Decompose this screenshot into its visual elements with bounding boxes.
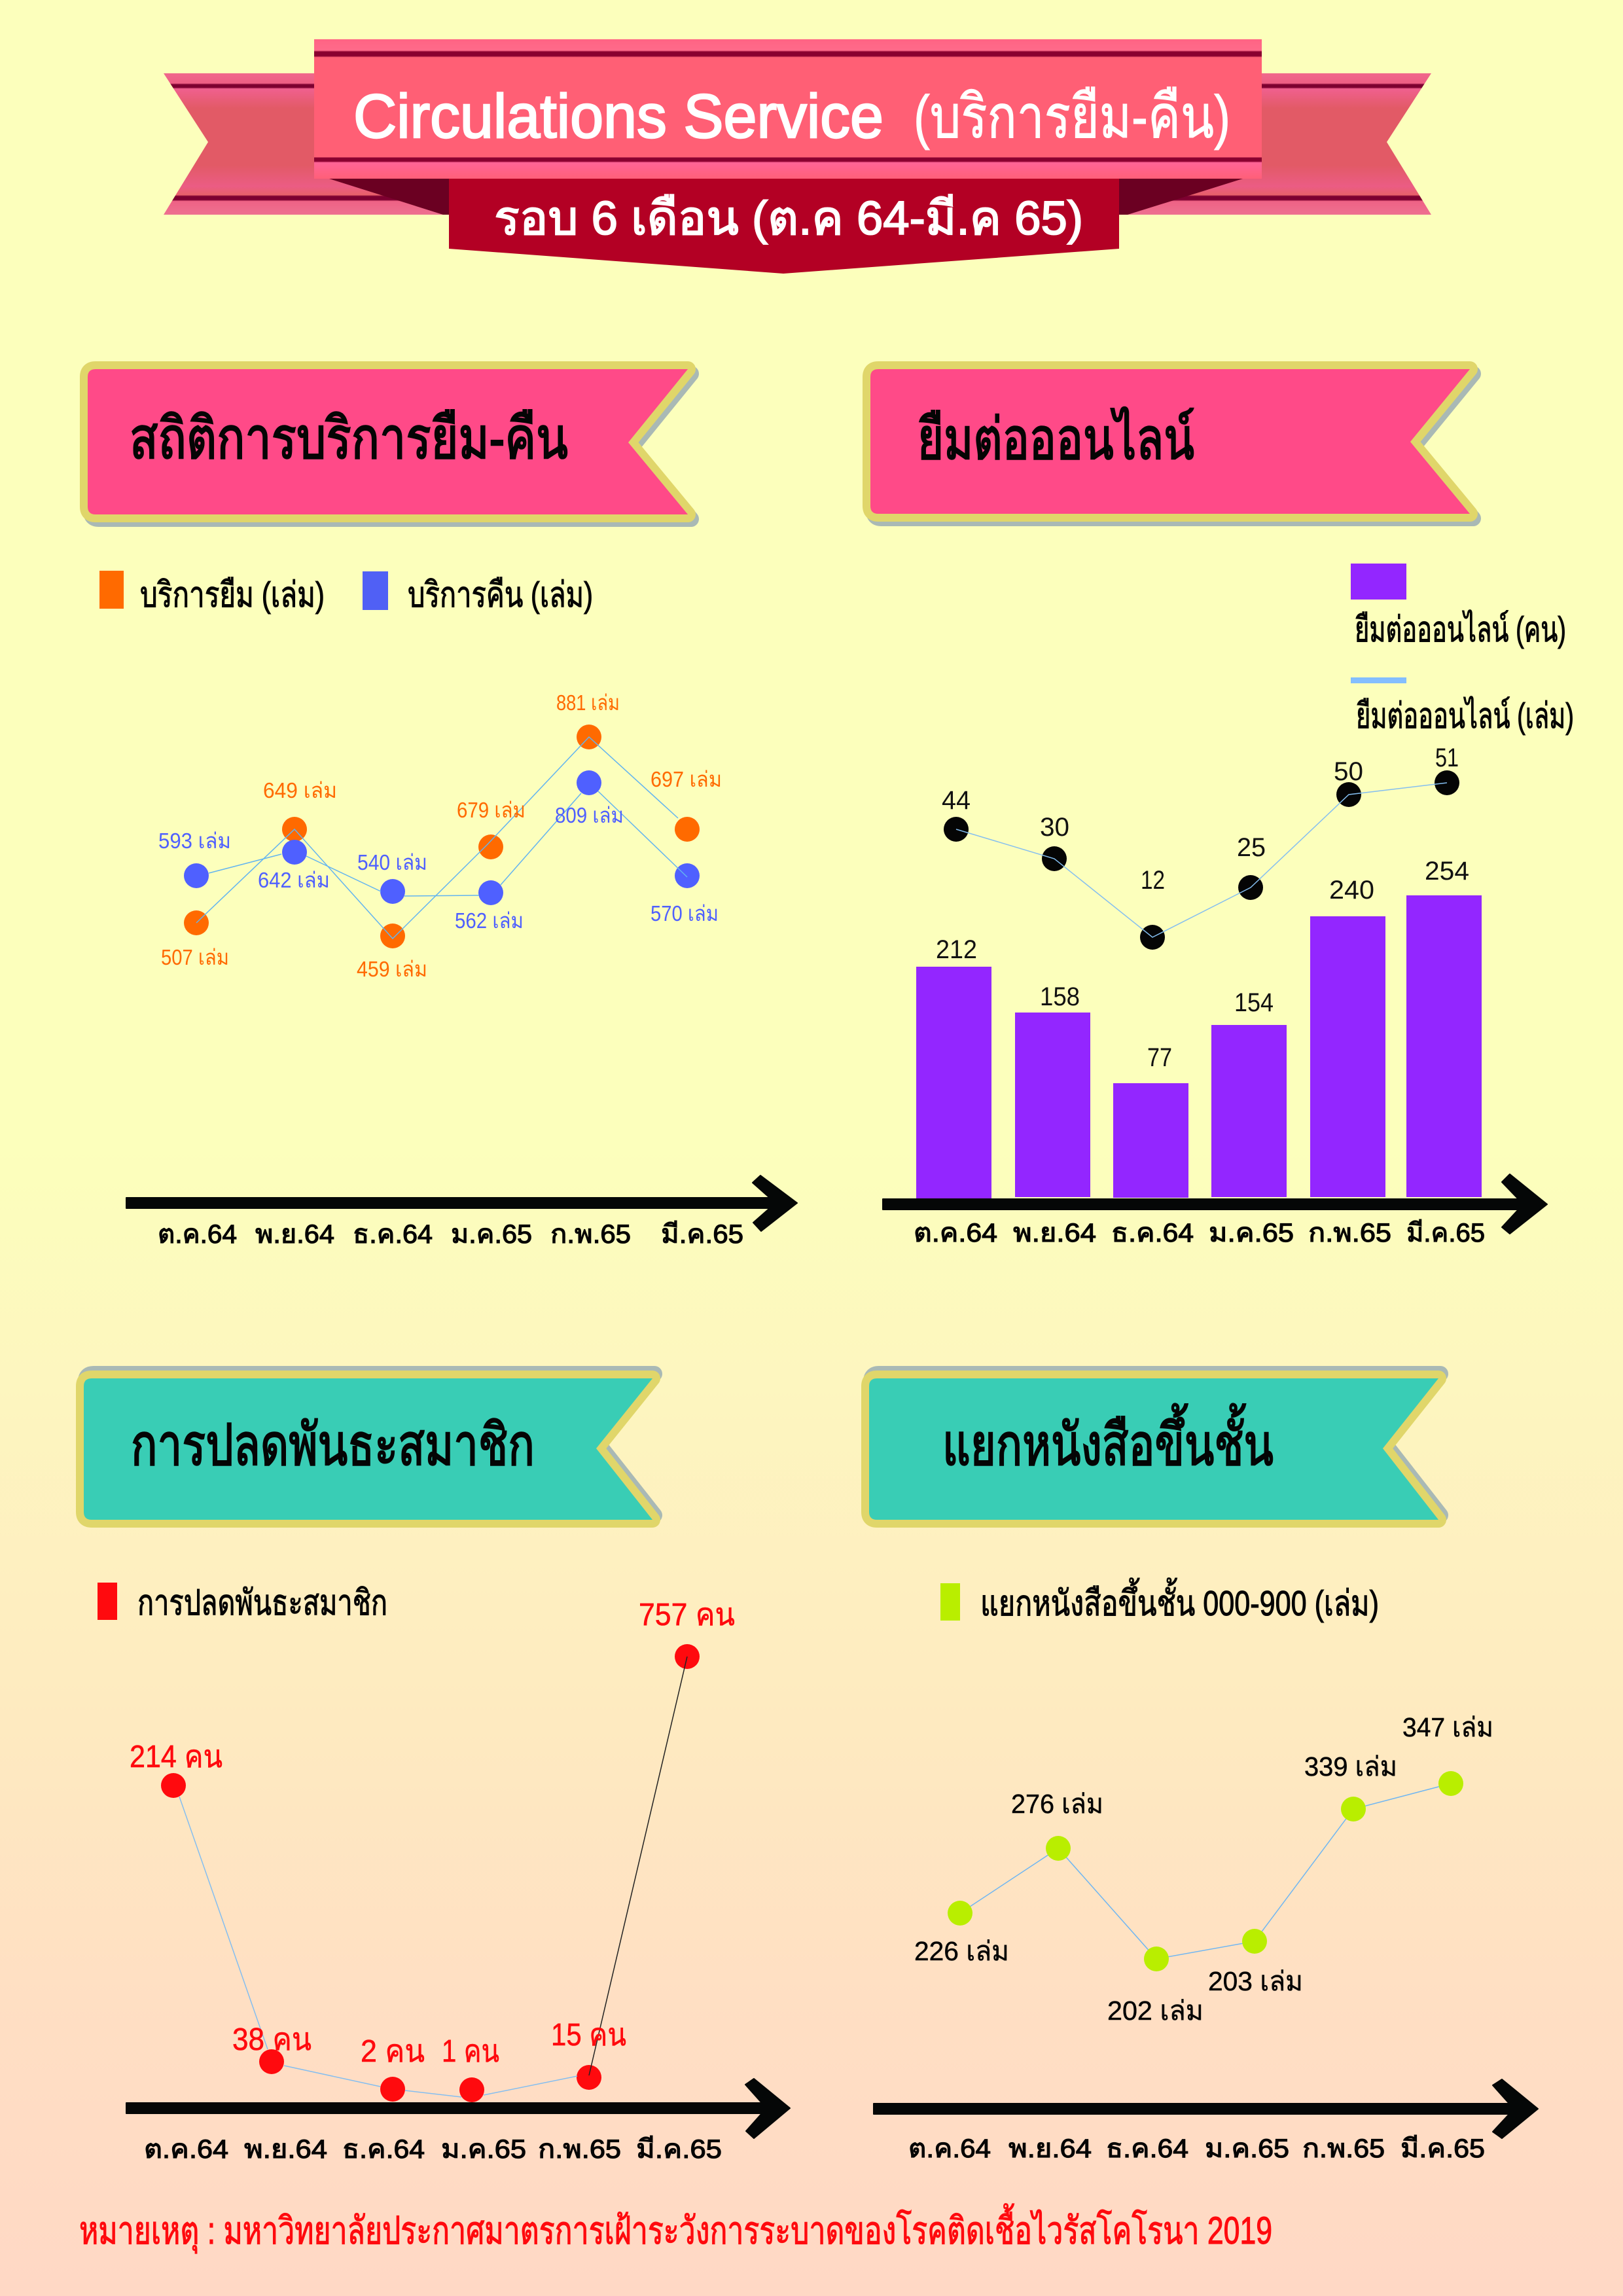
month labels: พ.ย.64 [244, 2135, 327, 2164]
panel: membership release [84, 1374, 790, 2164]
month labels: ต.ค.64 [908, 2134, 991, 2163]
month labels: พ.ย.64 [1008, 2134, 1092, 2163]
line chart: borrow and return: 507 เล่ม [161, 945, 229, 969]
month labels: มี.ค.65 [1400, 2134, 1485, 2163]
line chart: membership release: 1 คน [442, 2034, 499, 2069]
heading banner: circulation statistics: สถิติการบริการยืม-คืน [130, 406, 568, 471]
ribbon main band [314, 39, 1262, 179]
bar chart: 240 [1329, 876, 1374, 905]
line chart: book classification: 339 เล่ม [1304, 1751, 1397, 1782]
line chart: book classification: 226 เล่ม [914, 1936, 1009, 1966]
month labels [908, 2134, 1485, 2163]
month labels: ธ.ค.64 [353, 1220, 433, 1249]
line chart: borrow and return: 697 เล่ม [651, 767, 722, 791]
heading banner: book classification [869, 1374, 1440, 1520]
month labels: ก.พ.65 [1302, 2134, 1385, 2163]
month labels [144, 2135, 722, 2164]
line chart: book classification: 203 เล่ม [1208, 1966, 1303, 1996]
line chart: online books: 44 [942, 786, 971, 815]
bar chart: 154 [1234, 988, 1274, 1017]
line chart: online books: 51 [1435, 744, 1459, 772]
month labels: ธ.ค.64 [1111, 1219, 1194, 1247]
heading banner: book classification: แยกหนังสือขึ้นชั้น [942, 1404, 1274, 1477]
bar chart [916, 857, 1482, 1198]
month labels: ม.ค.65 [441, 2135, 526, 2164]
line chart: borrow and return: 570 เล่ม [651, 901, 719, 925]
heading banner: membership release: การปลดพันธะสมาชิก [131, 1412, 535, 1477]
heading banner: online borrowing: ยืมต่อออนไลน์ [918, 406, 1194, 471]
legend: borrow and return: บริการยืม (เล่ม) [140, 575, 325, 615]
line chart: membership release: 757 คน [639, 1598, 735, 1632]
line chart: borrow and return: 540 เล่ม [357, 850, 427, 874]
month labels: ก.พ.65 [538, 2135, 621, 2164]
line chart: online books: 12 [1141, 866, 1165, 895]
ribbon right tail [1126, 73, 1431, 215]
legend: book classification: แยกหนังสือขึ้นชั้น 000-900 (เล่ม) [980, 1578, 1379, 1623]
line chart: membership release: 15 คน [551, 2018, 626, 2053]
legend: borrow and return: บริการคืน (เล่ม) [408, 575, 593, 615]
heading banner: circulation statistics [88, 369, 691, 519]
bar chart: 158 [1040, 982, 1080, 1011]
line chart: online books: 25 [1237, 833, 1266, 862]
footnote: หมายเหตุ : มหาวิทยาลัยประกาศมาตรการเฝ้าระวังการระบาดของโรคติดเชื้อไวรัสโคโรนา 2019 [79, 2204, 1272, 2254]
arrow axis [126, 2079, 790, 2138]
subtitle banner [449, 179, 1119, 274]
line chart: membership release: 38 คน [232, 2022, 312, 2057]
month labels: ต.ค.64 [914, 1219, 997, 1247]
title thai: (บริการยืม-คืน) [914, 84, 1230, 151]
panel: circulation statistics [88, 369, 797, 1249]
line chart: book classification: 202 เล่ม [1107, 1996, 1204, 2026]
month labels: ก.พ.65 [550, 1220, 631, 1249]
heading banner: membership release [84, 1374, 654, 1520]
legend: borrow and return [99, 571, 593, 615]
month labels: มี.ค.65 [661, 1220, 743, 1249]
month labels: ต.ค.64 [158, 1220, 237, 1249]
month labels: มี.ค.65 [1406, 1219, 1485, 1247]
panel: online borrowing [870, 369, 1574, 1247]
line chart: borrow and return: 809 เล่ม [555, 803, 624, 827]
line chart: online books [942, 744, 1459, 950]
arrow axis [874, 2079, 1538, 2138]
line chart: membership release [130, 1598, 735, 2102]
title ribbon [164, 39, 1431, 274]
month labels [158, 1220, 743, 1249]
line chart: borrow and return: 459 เล่ม [357, 957, 427, 981]
line chart: online books: 30 [1040, 813, 1069, 842]
line chart: borrow and return: 593 เล่ม [158, 829, 231, 853]
line chart: membership release: 2 คน [361, 2034, 425, 2069]
title: Circulations Service [353, 82, 883, 151]
panel: book classification [869, 1374, 1538, 2163]
line chart: borrow and return: 562 เล่ม [455, 908, 524, 933]
month labels: ธ.ค.64 [1106, 2134, 1188, 2163]
line chart: book classification [914, 1712, 1493, 2026]
month labels: ก.พ.65 [1308, 1219, 1391, 1247]
month labels: ต.ค.64 [144, 2135, 228, 2164]
bar chart: 212 [936, 935, 977, 964]
bar chart: 254 [1425, 857, 1469, 886]
ribbon left fold [329, 179, 452, 215]
month labels: ม.ค.65 [451, 1220, 532, 1249]
line chart: borrow and return: 679 เล่ม [457, 798, 526, 822]
month labels: พ.ย.64 [1013, 1219, 1096, 1247]
month labels: ธ.ค.64 [342, 2135, 425, 2164]
line chart: membership release: 214 คน [130, 1740, 223, 1774]
month labels: พ.ย.64 [255, 1220, 334, 1249]
subtitle: รอบ 6 เดือน (ต.ค 64-มี.ค 65) [494, 192, 1083, 245]
line chart: online books: 50 [1334, 757, 1363, 786]
legend: membership release [98, 1583, 387, 1623]
line chart: book classification: 276 เล่ม [1011, 1789, 1103, 1819]
line chart: borrow and return [158, 691, 722, 981]
arrow axis [883, 1174, 1547, 1234]
month labels: ม.ค.65 [1209, 1219, 1294, 1247]
month labels: มี.ค.65 [636, 2135, 722, 2164]
ribbon right fold [1116, 179, 1243, 215]
line chart: borrow and return: 642 เล่ม [258, 868, 330, 892]
bar chart: 77 [1147, 1043, 1172, 1072]
line chart: borrow and return: 881 เล่ม [556, 691, 620, 715]
legend: book classification [940, 1578, 1379, 1623]
legend: online borrowing [1351, 564, 1574, 736]
month labels: ม.ค.65 [1205, 2134, 1289, 2163]
line chart: book classification: 347 เล่ม [1402, 1712, 1493, 1742]
month labels [914, 1219, 1485, 1247]
legend: membership release: การปลดพันธะสมาชิก [137, 1583, 387, 1623]
arrow axis [126, 1175, 797, 1231]
heading banner: online borrowing [870, 369, 1473, 518]
line chart: borrow and return: 649 เล่ม [263, 778, 337, 802]
ribbon left tail [164, 73, 445, 215]
